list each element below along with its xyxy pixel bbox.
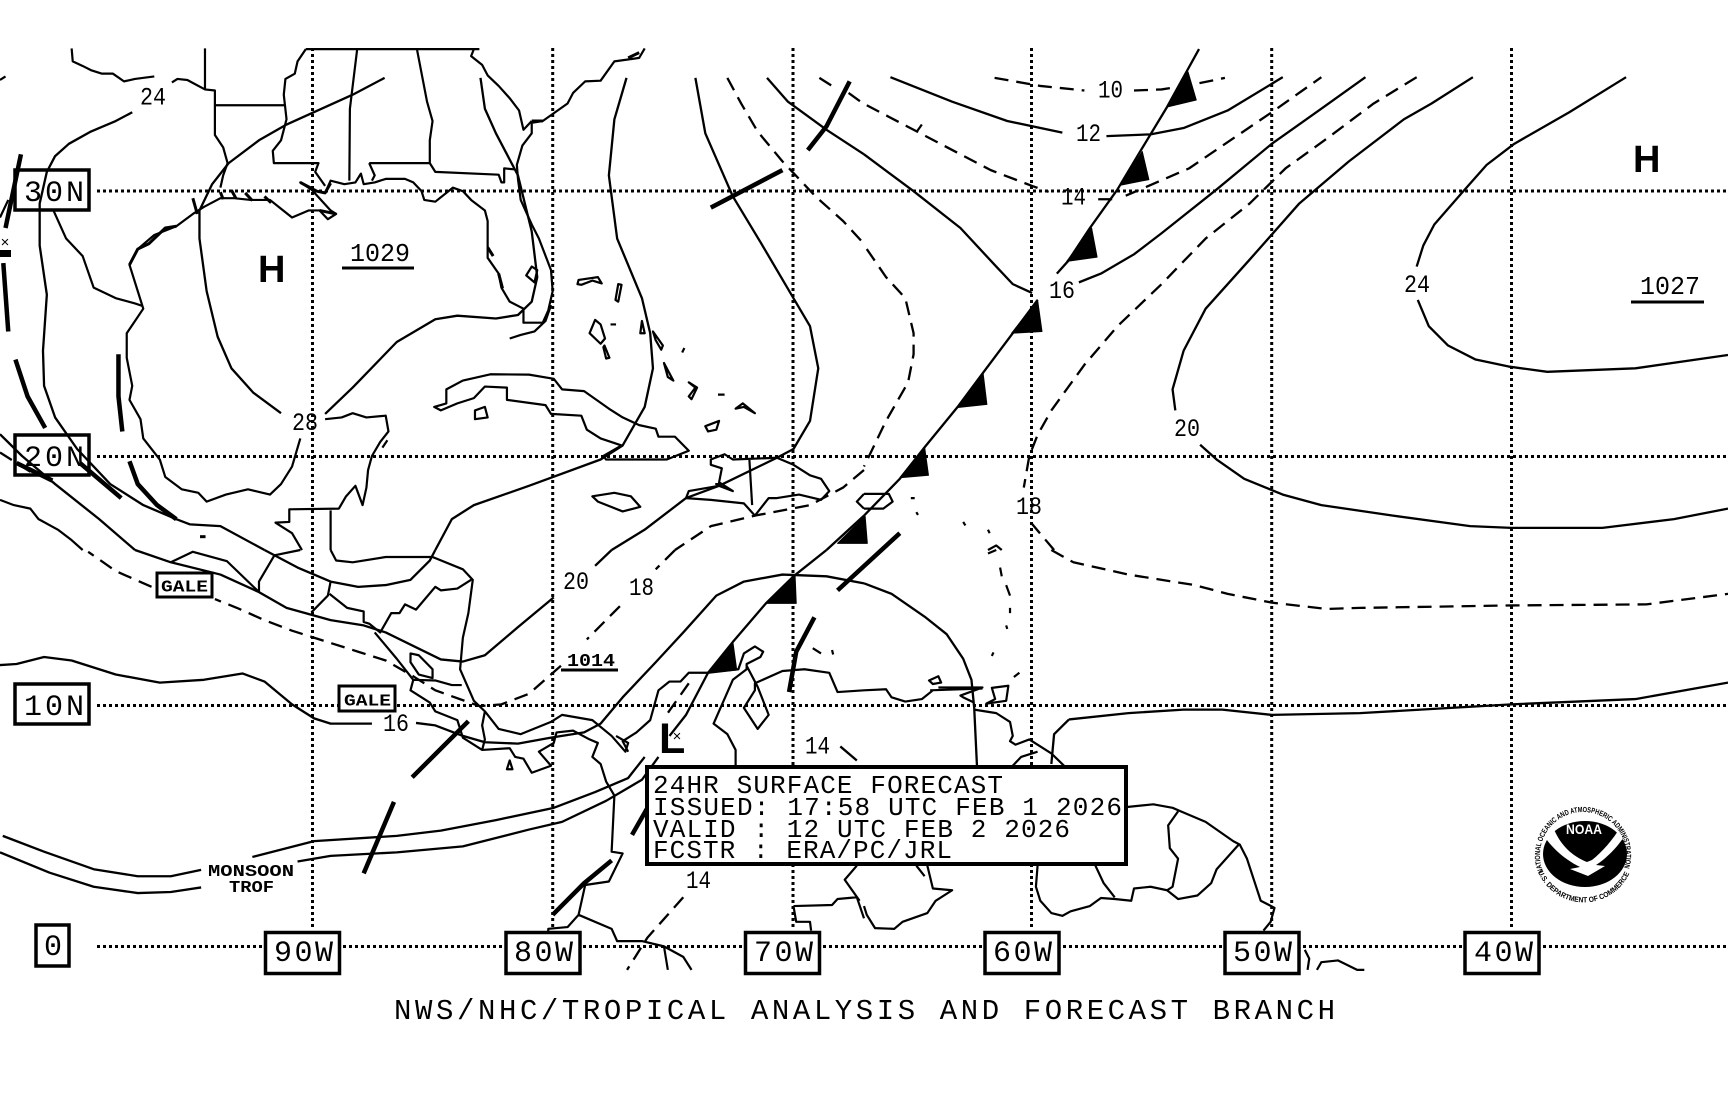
- low pressure centre: 1014: [567, 652, 615, 672]
- latitude label 20N: [15, 435, 89, 476]
- high pressure centre Atlantic: H: [1633, 139, 1660, 181]
- isobar 20 central: [0, 78, 818, 662]
- gale warning 2: [339, 686, 395, 712]
- longitude label 90W: 90W: [274, 937, 333, 971]
- isobar value labels: 16: [383, 710, 409, 739]
- latitude label 10N: [15, 684, 89, 725]
- longitude label 70W: 70W: [754, 937, 813, 971]
- high pressure centre Atlantic: 1027: [1640, 272, 1700, 302]
- high pressure centre Gulf: [258, 239, 414, 291]
- isobar 16 north: [767, 77, 1365, 293]
- longitude label 60W: 60W: [993, 937, 1052, 971]
- dashed front remainder near low: [664, 683, 689, 718]
- forecast info box: 24HR SURFACE FORECAST: [653, 771, 1003, 801]
- forecast info box: VALID : 12 UTC FEB 2 2026: [653, 815, 1070, 845]
- forecast info box: [647, 767, 1126, 866]
- isobar value labels: 14: [686, 867, 711, 896]
- isobar 12: [890, 77, 1283, 136]
- forecast info box: ISSUED: 17:58 UTC FEB 1 2026: [653, 793, 1122, 823]
- footer credit: NWS/NHC/TROPICAL ANALYSIS AND FORECAST BRANCH: [394, 995, 1335, 1028]
- isobar value labels: 28: [292, 409, 318, 438]
- forecast info box: FCSTR : ERA/PC/JRL: [653, 836, 952, 866]
- latitude label 0: [36, 925, 69, 966]
- isobar value labels: 18: [629, 574, 654, 603]
- isobar 16 south: [0, 575, 1728, 766]
- longitude label 50W: 50W: [1233, 937, 1292, 971]
- isobar value labels: 20: [563, 568, 589, 597]
- icon: NOAA logo: NOAA: [1566, 821, 1602, 837]
- surface troughs: [3, 81, 900, 915]
- isobar 14 dashed: [819, 77, 1321, 199]
- longitude label 90W: [266, 932, 340, 974]
- isobar 14 south: [840, 746, 857, 760]
- gale warning 2: GALE: [344, 692, 391, 712]
- storm center marker at map edge: ×: [0, 235, 10, 252]
- longitude label 70W: [746, 932, 820, 974]
- gale warning 1: GALE: [161, 578, 208, 598]
- isobar 14 south dashed: [627, 897, 683, 970]
- isobar value labels: 24: [140, 84, 166, 112]
- longitude label 40W: 40W: [1474, 937, 1533, 971]
- high pressure centre Gulf: H: [258, 249, 285, 291]
- isobar value labels: 20: [1174, 415, 1200, 444]
- isobar 24 west: [40, 78, 653, 587]
- isobar value labels: 12: [1076, 120, 1101, 149]
- cold front with triangles: [669, 49, 1199, 736]
- low pressure centre: ×: [672, 729, 682, 746]
- latitude label 10N: 10N: [24, 691, 84, 725]
- isobar value labels: 18: [1016, 493, 1042, 522]
- coastlines and borders: [0, 48, 1364, 970]
- high pressure centre Atlantic: [1631, 139, 1704, 302]
- isobar value labels: [140, 76, 1430, 896]
- isobar 28: [199, 78, 537, 414]
- icon: NOAA logo: U.S. DEPARTMENT OF COMMERCE: [1538, 870, 1630, 902]
- isobar 24 east: [1417, 77, 1728, 372]
- longitude label 80W: [506, 932, 580, 974]
- monsoon trough: [0, 757, 658, 893]
- isobar 18 dashed west: [0, 78, 914, 706]
- isobar value labels: 14: [805, 732, 830, 762]
- icon: NOAA logo: [1534, 806, 1632, 902]
- longitude label 60W: [985, 932, 1059, 974]
- isobar value labels: 24: [1404, 271, 1430, 300]
- monsoon trough label: MONSOON: [208, 863, 294, 882]
- low pressure centre: L: [659, 715, 685, 763]
- longitude label 80W: 80W: [514, 937, 573, 971]
- high pressure centre Gulf: 1029: [350, 239, 410, 269]
- longitude label 50W: [1225, 932, 1299, 974]
- latitude label 30N: [15, 170, 89, 211]
- icon: NOAA logo: NATIONAL OCEANIC AND ATMOSPHERIC ADMINISTRATION: [1534, 806, 1632, 874]
- latitude label 0: 0: [44, 931, 62, 965]
- isobar 18 dashed east: [1024, 77, 1728, 609]
- longitude label 40W: [1465, 932, 1539, 974]
- monsoon trough label: TROF: [229, 879, 274, 898]
- gale warning 1: [157, 573, 212, 598]
- latitude label 20N: 20N: [24, 442, 84, 476]
- latitude label 30N: 30N: [24, 177, 84, 211]
- low pressure centre: [561, 652, 685, 763]
- isobar 20 east: [1173, 77, 1728, 528]
- isobar value labels: 16: [1049, 277, 1075, 306]
- isobar 10 dashed: [995, 78, 1225, 90]
- isobar value labels: 10: [1098, 76, 1123, 106]
- lat/lon dotted grid: [97, 48, 1728, 946]
- storm center marker at map edge: [0, 235, 11, 257]
- monsoon trough label: [208, 863, 294, 898]
- isobar value labels: 14: [1061, 184, 1086, 212]
